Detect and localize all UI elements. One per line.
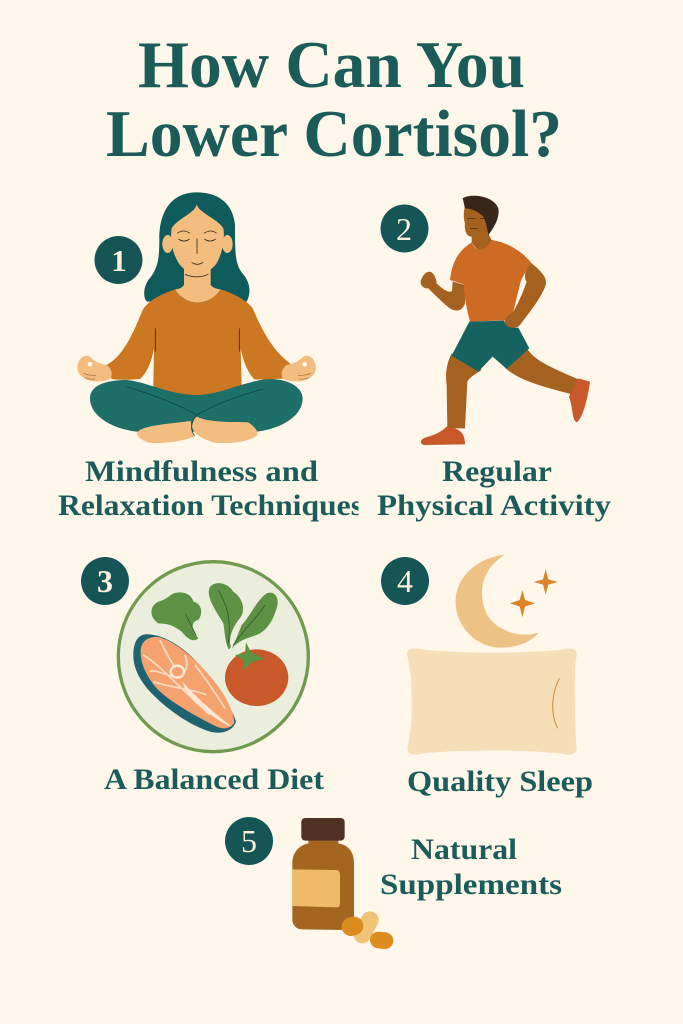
label: physical activity	[377, 455, 611, 522]
label: quality sleep: Quality Sleep	[407, 765, 593, 798]
label: natural supplements: Natural	[411, 833, 517, 866]
panel: mindfulness	[58, 192, 363, 522]
label: natural supplements: Supplements	[380, 868, 562, 901]
panel: quality sleep	[381, 555, 593, 798]
label: balanced diet: A Balanced Diet	[104, 763, 324, 796]
label: mindfulness	[58, 455, 363, 522]
label: natural supplements	[380, 833, 562, 901]
number badge 5: 5	[241, 823, 257, 859]
label: physical activity: Physical Activity	[377, 489, 611, 522]
label: mindfulness: Relaxation Techniques	[58, 489, 363, 522]
icon: moon and stars	[456, 555, 558, 648]
number badge 3: 3	[97, 563, 113, 599]
number badge 2	[380, 204, 428, 252]
title: How Can You	[138, 28, 525, 102]
icon: supplement bottle	[292, 818, 385, 941]
title: Lower Cortisol?	[106, 97, 562, 171]
number badge 5	[225, 817, 273, 865]
label: mindfulness: Mindfulness and	[85, 455, 318, 488]
number badge 1: 1	[111, 243, 127, 278]
icon: plate of food	[118, 562, 308, 752]
panel: physical activity	[377, 196, 611, 522]
label: physical activity: Regular	[442, 455, 552, 488]
icon: meditating woman	[77, 192, 316, 443]
number badge 2: 2	[396, 211, 412, 247]
icon: running man	[421, 196, 590, 445]
panel: natural supplements	[225, 817, 562, 941]
number badge 1	[94, 236, 142, 284]
number badge 4: 4	[397, 563, 413, 599]
panel: balanced diet	[81, 557, 324, 796]
number badge 4	[381, 557, 429, 605]
icon: pillow	[407, 649, 577, 755]
number badge 3	[81, 557, 129, 605]
title	[106, 28, 562, 171]
